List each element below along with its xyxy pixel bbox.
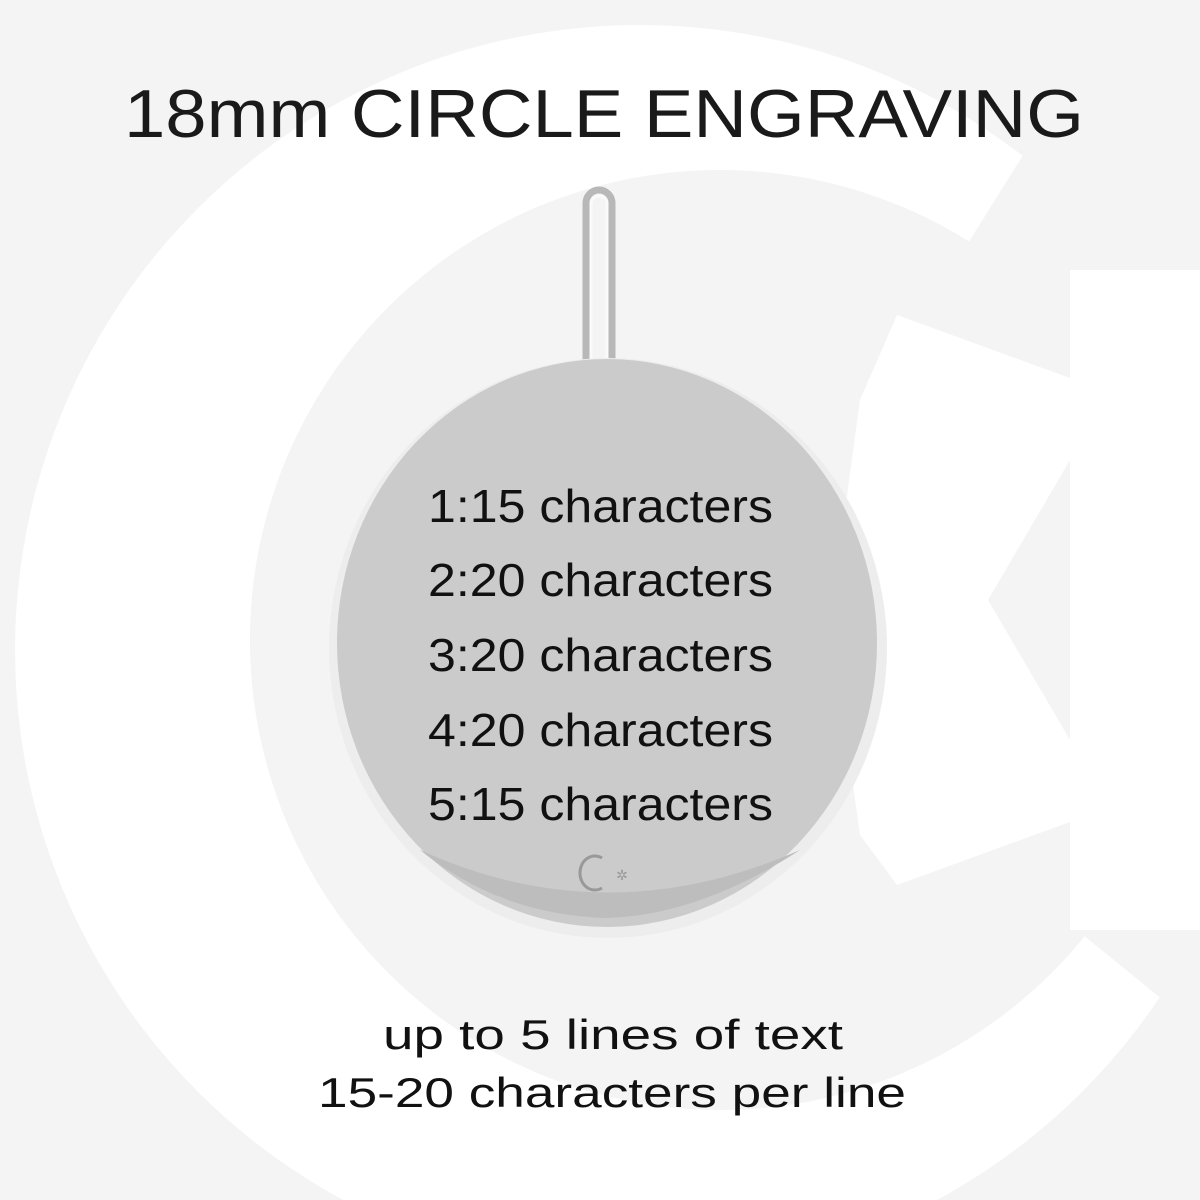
- title: 18mm CIRCLE ENGRAVING: [124, 76, 1084, 152]
- engraving lines: 3:20 characters: [428, 629, 773, 681]
- disc: [329, 358, 887, 938]
- icon: maker mark: [580, 856, 628, 890]
- engraving lines: 2:20 characters: [428, 554, 773, 606]
- engraving lines: [428, 480, 773, 830]
- bottom caption: up to 5 lines of text: [383, 1011, 843, 1058]
- engraving lines: 4:20 characters: [428, 704, 773, 756]
- engraving lines: 5:15 characters: [428, 778, 773, 830]
- engraving lines: 1:15 characters: [428, 480, 773, 532]
- icon: maker mark: ✲: [616, 868, 628, 884]
- pendant: [329, 190, 887, 938]
- bottom caption: [318, 1011, 906, 1116]
- bail: [560, 190, 645, 405]
- bottom caption: 15-20 characters per line: [318, 1069, 906, 1116]
